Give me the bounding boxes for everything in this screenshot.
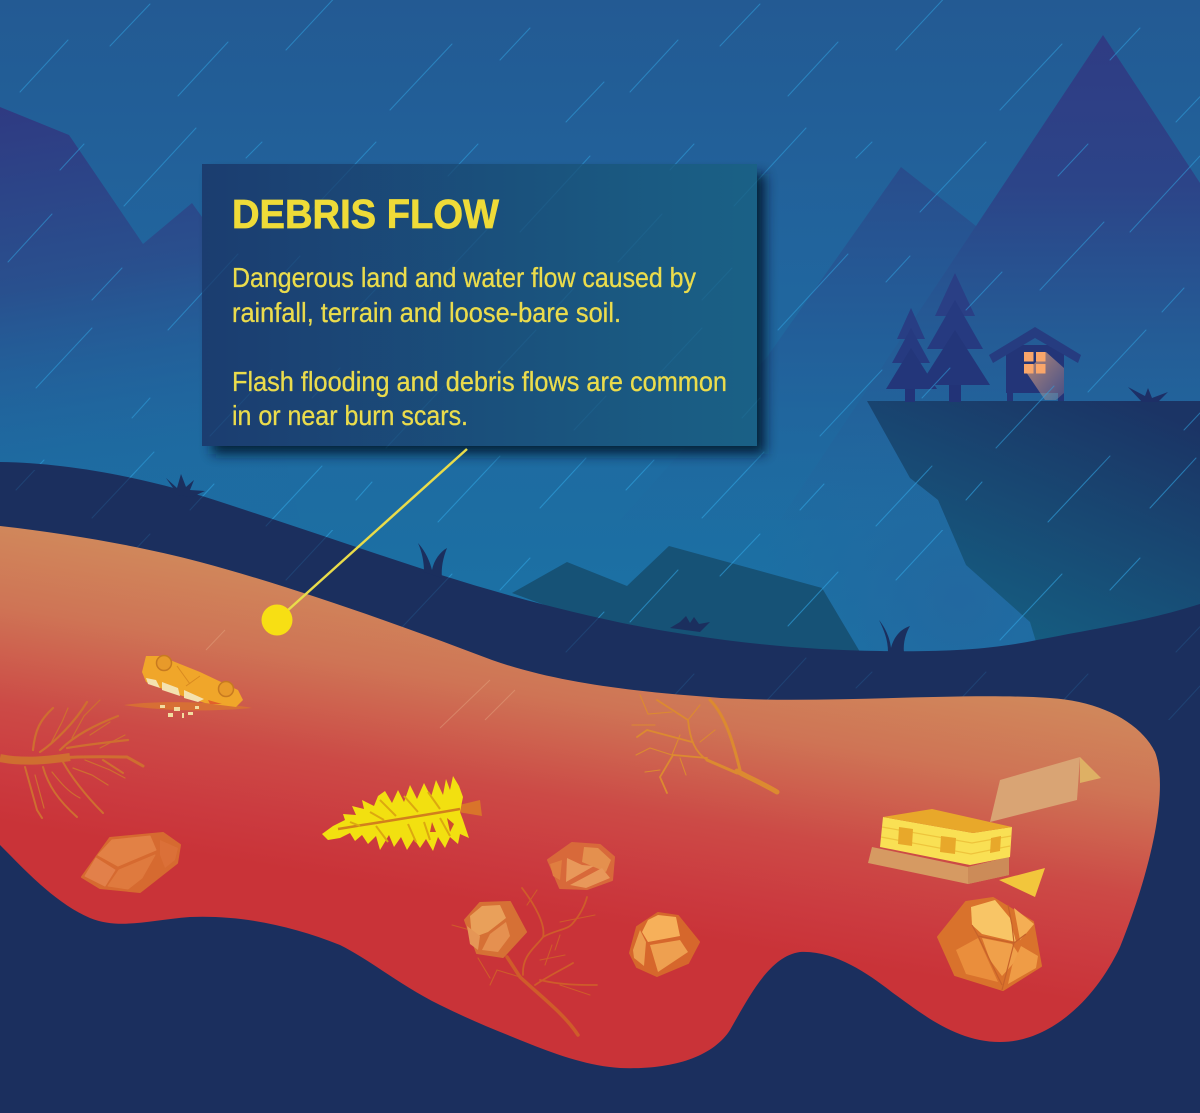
cabin (989, 327, 1081, 401)
grass tufts on hill (166, 474, 910, 652)
heading: DEBRIS FLOW (232, 191, 499, 237)
cliff grass (1128, 387, 1168, 402)
lit window (1024, 352, 1046, 374)
cliff rock (867, 401, 1200, 645)
cliff with cabin and trees (867, 273, 1200, 645)
small pine (886, 308, 937, 402)
faint rain on hill (0, 470, 1200, 720)
right mountains (620, 35, 1200, 520)
icon: rock lower center (630, 913, 699, 976)
description paragraph 1 (232, 262, 696, 328)
icon: fallen dead tree upper right (632, 695, 777, 793)
description paragraph 2: Flash flooding and debris flows are common (232, 366, 727, 397)
icon: overturned car (124, 656, 252, 718)
sky background (0, 0, 1200, 700)
roof fragment (999, 868, 1045, 897)
icon: fallen bare tree left (0, 700, 143, 818)
description paragraph 1: rainfall, terrain and loose-bare soil. (232, 297, 621, 328)
dark foreground hill (0, 462, 1200, 1113)
faint rain over flow (206, 630, 515, 728)
panel: debris flow text box (202, 164, 757, 446)
foundation (868, 847, 1009, 884)
icon: rock middle (548, 843, 614, 889)
description paragraph 1: Dangerous land and water flow caused by (232, 262, 696, 293)
left mountains (0, 107, 300, 520)
icon: large rock right (938, 898, 1041, 990)
icon: broken house (868, 757, 1101, 897)
panel shadow (212, 174, 765, 454)
walls (880, 817, 1012, 865)
background low hills (512, 546, 860, 652)
tall pine (920, 273, 990, 402)
icon: bare tree lower center (452, 888, 597, 1035)
house windows (898, 827, 1001, 854)
description paragraph 2 (232, 366, 727, 431)
icon: rock over tree (465, 902, 526, 957)
rain over the sky (0, 0, 1200, 660)
roof top (883, 809, 1012, 833)
debris flow body (0, 526, 1160, 1068)
description paragraph 2: in or near burn scars. (232, 400, 468, 431)
detached roof (990, 757, 1080, 822)
sky glow (760, 400, 1160, 700)
callout leader line and marker (262, 449, 467, 636)
icon: rock left (82, 833, 180, 892)
icon: fallen pine tree (322, 776, 482, 851)
